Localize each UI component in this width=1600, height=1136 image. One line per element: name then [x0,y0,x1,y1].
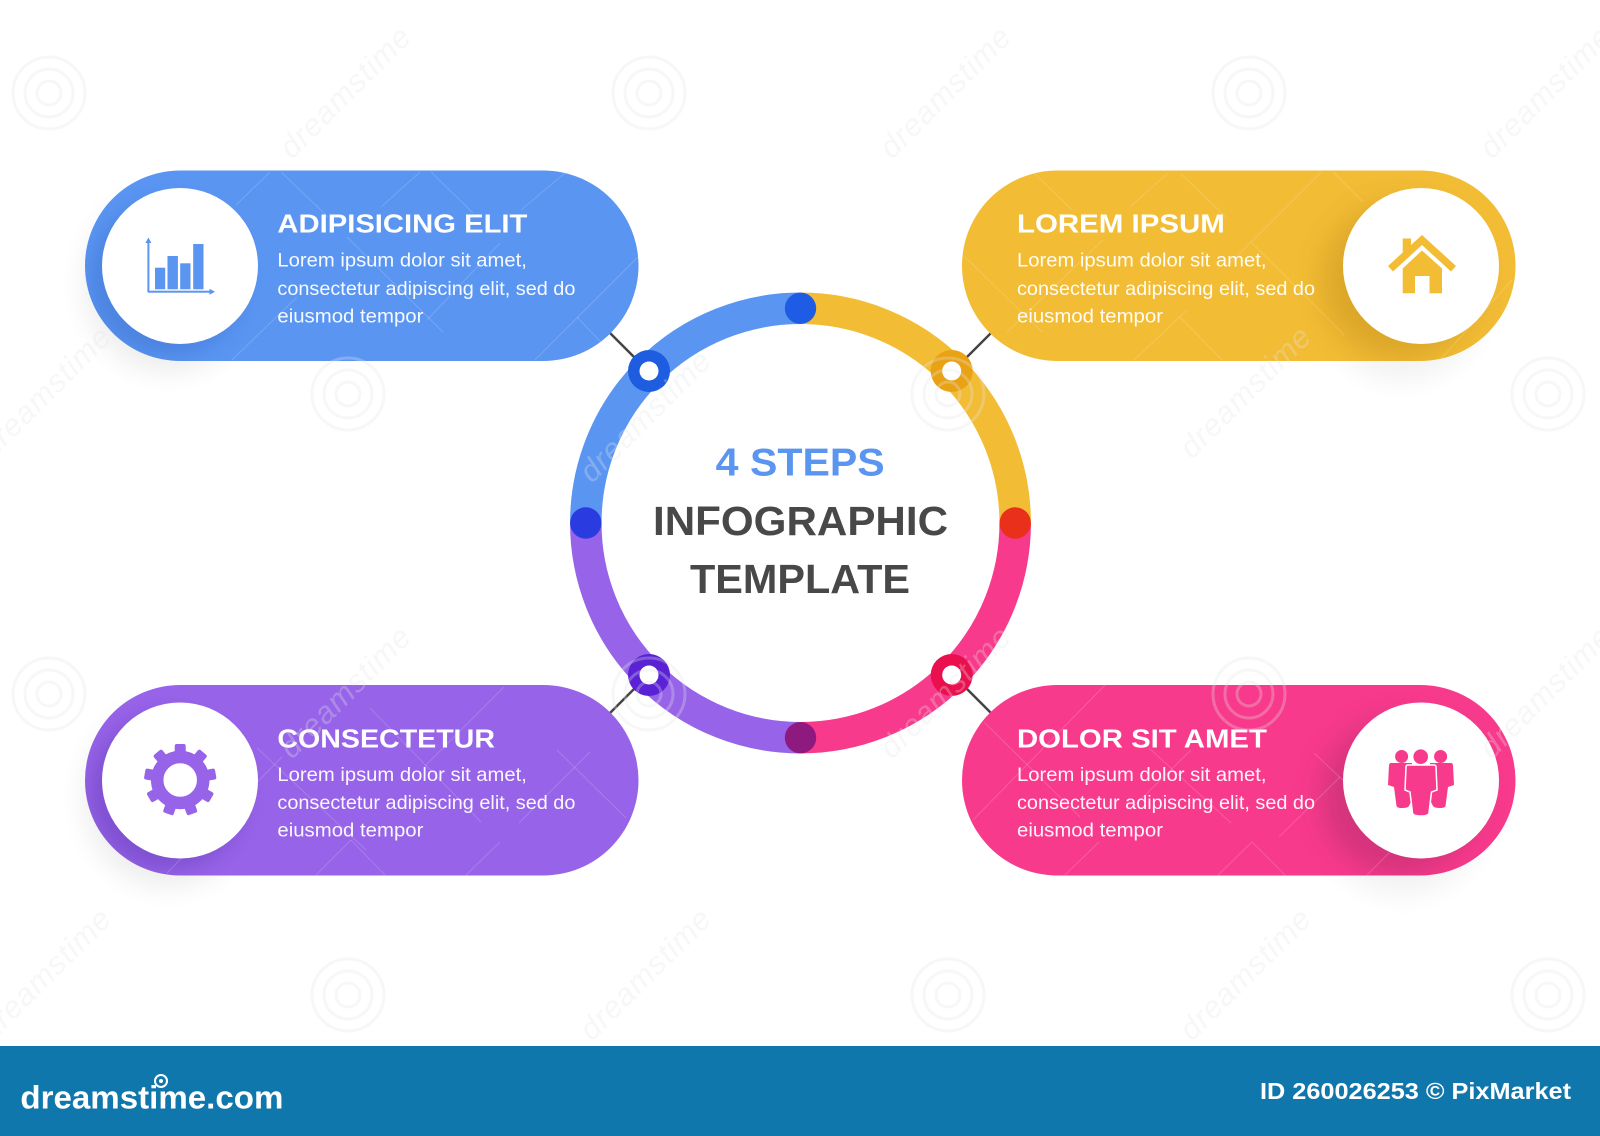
body text: Lorem ipsum dolor sit amet, [1017,764,1266,786]
watermark: dreamstime [872,619,1019,765]
connector lines [610,333,991,713]
heading: adipisicing elit: ADIPISICING ELIT [277,209,528,239]
icon: bar chart [145,238,215,295]
footer bar [0,1046,1600,1136]
ring joint dots [570,293,1031,753]
center title: 4 STEPS [716,442,885,485]
body text: Lorem ipsum dolor sit amet, [277,764,527,786]
panel: consectetur [84,685,638,887]
body text [1017,250,1315,327]
watermark: dreamstime [272,619,419,765]
center title [653,442,948,602]
ring nodes [628,350,973,696]
body text [277,764,576,842]
body text: eiusmod tempor [1017,305,1164,327]
center title: TEMPLATE [690,556,910,602]
watermark: dreamstime [572,343,719,489]
body text: eiusmod tempor [1017,820,1164,842]
heading: consectetur: CONSECTETUR [277,723,495,753]
watermark: dreamstime [272,19,419,165]
watermark: dreamstime [1172,901,1319,1047]
watermark: dreamstime [572,901,719,1047]
panel: adipisicing elit [84,170,638,372]
heading: lorem ipsum: LOREM IPSUM [1017,209,1225,239]
body text [1017,764,1315,842]
body text: eiusmod tempor [277,820,424,842]
body text: eiusmod tempor [277,305,424,327]
ring chart [570,293,1031,753]
body text: consectetur adipiscing elit, sed do [277,792,576,814]
body text [277,250,576,327]
panel: dolor sit amet [962,685,1516,895]
icon: people [1388,749,1454,816]
footer logo: dreamstime.com [20,1080,283,1116]
image id credit: ID 260026253 © PixMarket [1260,1078,1571,1104]
icon: gear [144,744,217,816]
watermark: dreamstime [872,19,1019,165]
body text: Lorem ipsum dolor sit amet, [277,250,527,272]
watermark: dreamstime [1172,319,1319,465]
panel: lorem ipsum [962,170,1516,380]
heading: dolor sit amet: DOLOR SIT AMET [1017,723,1267,753]
body text: Lorem ipsum dolor sit amet, [1017,250,1266,272]
center title: INFOGRAPHIC [653,498,948,544]
icon: house [1388,235,1456,293]
body text: consectetur adipiscing elit, sed do [1017,792,1315,814]
body text: consectetur adipiscing elit, sed do [1017,278,1315,300]
body text: consectetur adipiscing elit, sed do [277,278,576,300]
